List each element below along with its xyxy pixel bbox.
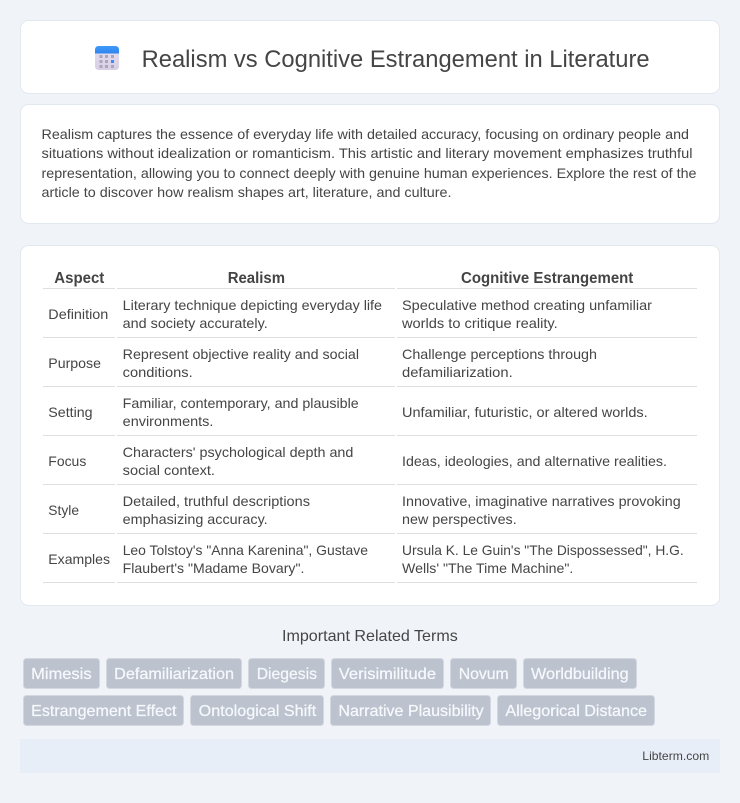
row: style: Detailed, truthful descriptions: [123, 493, 310, 509]
row: definition: Literary technique depicting everyday life: [123, 297, 382, 313]
tag list: related terms: Narrative Plausibility: [338, 703, 484, 720]
table header row: [54, 270, 634, 287]
panel: comparison table: [20, 246, 720, 606]
intro text: representation, allowing you to connect deeply with genuine human experiences. Explore the rest of the: [42, 165, 697, 181]
row: style: new perspectives.: [402, 511, 517, 527]
row: definition: [48, 297, 652, 331]
panel: introduction: [20, 104, 720, 224]
tag list: related terms: [24, 658, 654, 726]
row: setting: Setting: [48, 404, 93, 420]
row: purpose: conditions.: [123, 364, 193, 380]
row: purpose: defamiliarization.: [402, 364, 513, 380]
tag list: related terms: Diegesis: [257, 666, 317, 683]
row: style: Style: [48, 502, 79, 518]
row: focus: Focus: [48, 453, 86, 469]
row: examples: Ursula K. Le Guin's "The Dispossessed", H.G.: [402, 542, 684, 558]
row: setting: [48, 395, 648, 429]
heading: related terms: Important Related Terms: [282, 628, 458, 645]
row: purpose: Challenge perceptions through: [402, 346, 597, 362]
row: style: Innovative, imaginative narratives provoking: [402, 493, 681, 509]
footer: Libterm.com: [642, 749, 709, 763]
row: purpose: Represent objective reality and social: [123, 346, 359, 362]
row: examples: Examples: [48, 551, 110, 567]
row: definition: worlds to critique reality.: [401, 315, 558, 331]
table header row: Cognitive Estrangement: [461, 270, 634, 287]
intro text: situations without idealization or romanticism. This artistic and literary movement emphasizes truthful: [42, 145, 692, 161]
row: setting: environments.: [123, 413, 213, 429]
title: Realism vs Cognitive Estrangement in Literature: [142, 46, 650, 73]
tag list: related terms: Worldbuilding: [531, 666, 629, 683]
row: purpose: Purpose: [48, 355, 101, 371]
tag list: related terms: Defamiliarization: [114, 666, 234, 683]
row: examples: [48, 542, 684, 576]
intro text: [42, 126, 697, 200]
row: definition: Speculative method creating unfamiliar: [402, 297, 652, 313]
panel: title card: [20, 20, 720, 94]
tag list: related terms: Verisimilitude: [339, 666, 436, 683]
row: setting: Familiar, contemporary, and plausible: [123, 395, 359, 411]
row: examples: Flaubert's "Madame Bovary".: [123, 560, 304, 576]
row: purpose: [48, 346, 597, 380]
tag list: related terms: Novum: [459, 666, 509, 683]
row: definition: Definition: [48, 306, 108, 322]
row: focus: Characters' psychological depth and: [123, 444, 353, 460]
footer: [20, 739, 720, 773]
intro text: Realism captures the essence of everyday life with detailed accuracy, focusing on ordinary people and: [42, 126, 689, 142]
row: examples: Leo Tolstoy's "Anna Karenina", Gustave: [123, 542, 368, 558]
row: style: [48, 493, 681, 527]
tag list: related terms: Mimesis: [31, 666, 92, 683]
row: focus: social context.: [123, 462, 215, 478]
row: focus: Ideas, ideologies, and alternative realities.: [402, 453, 667, 469]
tag list: related terms: Estrangement Effect: [31, 703, 177, 720]
icon: calendar: [95, 46, 119, 70]
intro text: article to discover how realism shapes art, literature, and culture.: [42, 184, 452, 200]
row: focus: [48, 444, 667, 478]
row: setting: Unfamiliar, futuristic, or altered worlds.: [402, 404, 648, 420]
tag list: related terms: Allegorical Distance: [505, 703, 647, 720]
row: examples: Wells' "The Time Machine".: [402, 560, 573, 576]
row: definition: and society accurately.: [123, 315, 268, 331]
table header row: Realism: [228, 270, 285, 287]
table header row: Aspect: [54, 270, 105, 287]
tag list: related terms: Ontological Shift: [199, 703, 317, 720]
row: style: emphasizing accuracy.: [123, 511, 268, 527]
